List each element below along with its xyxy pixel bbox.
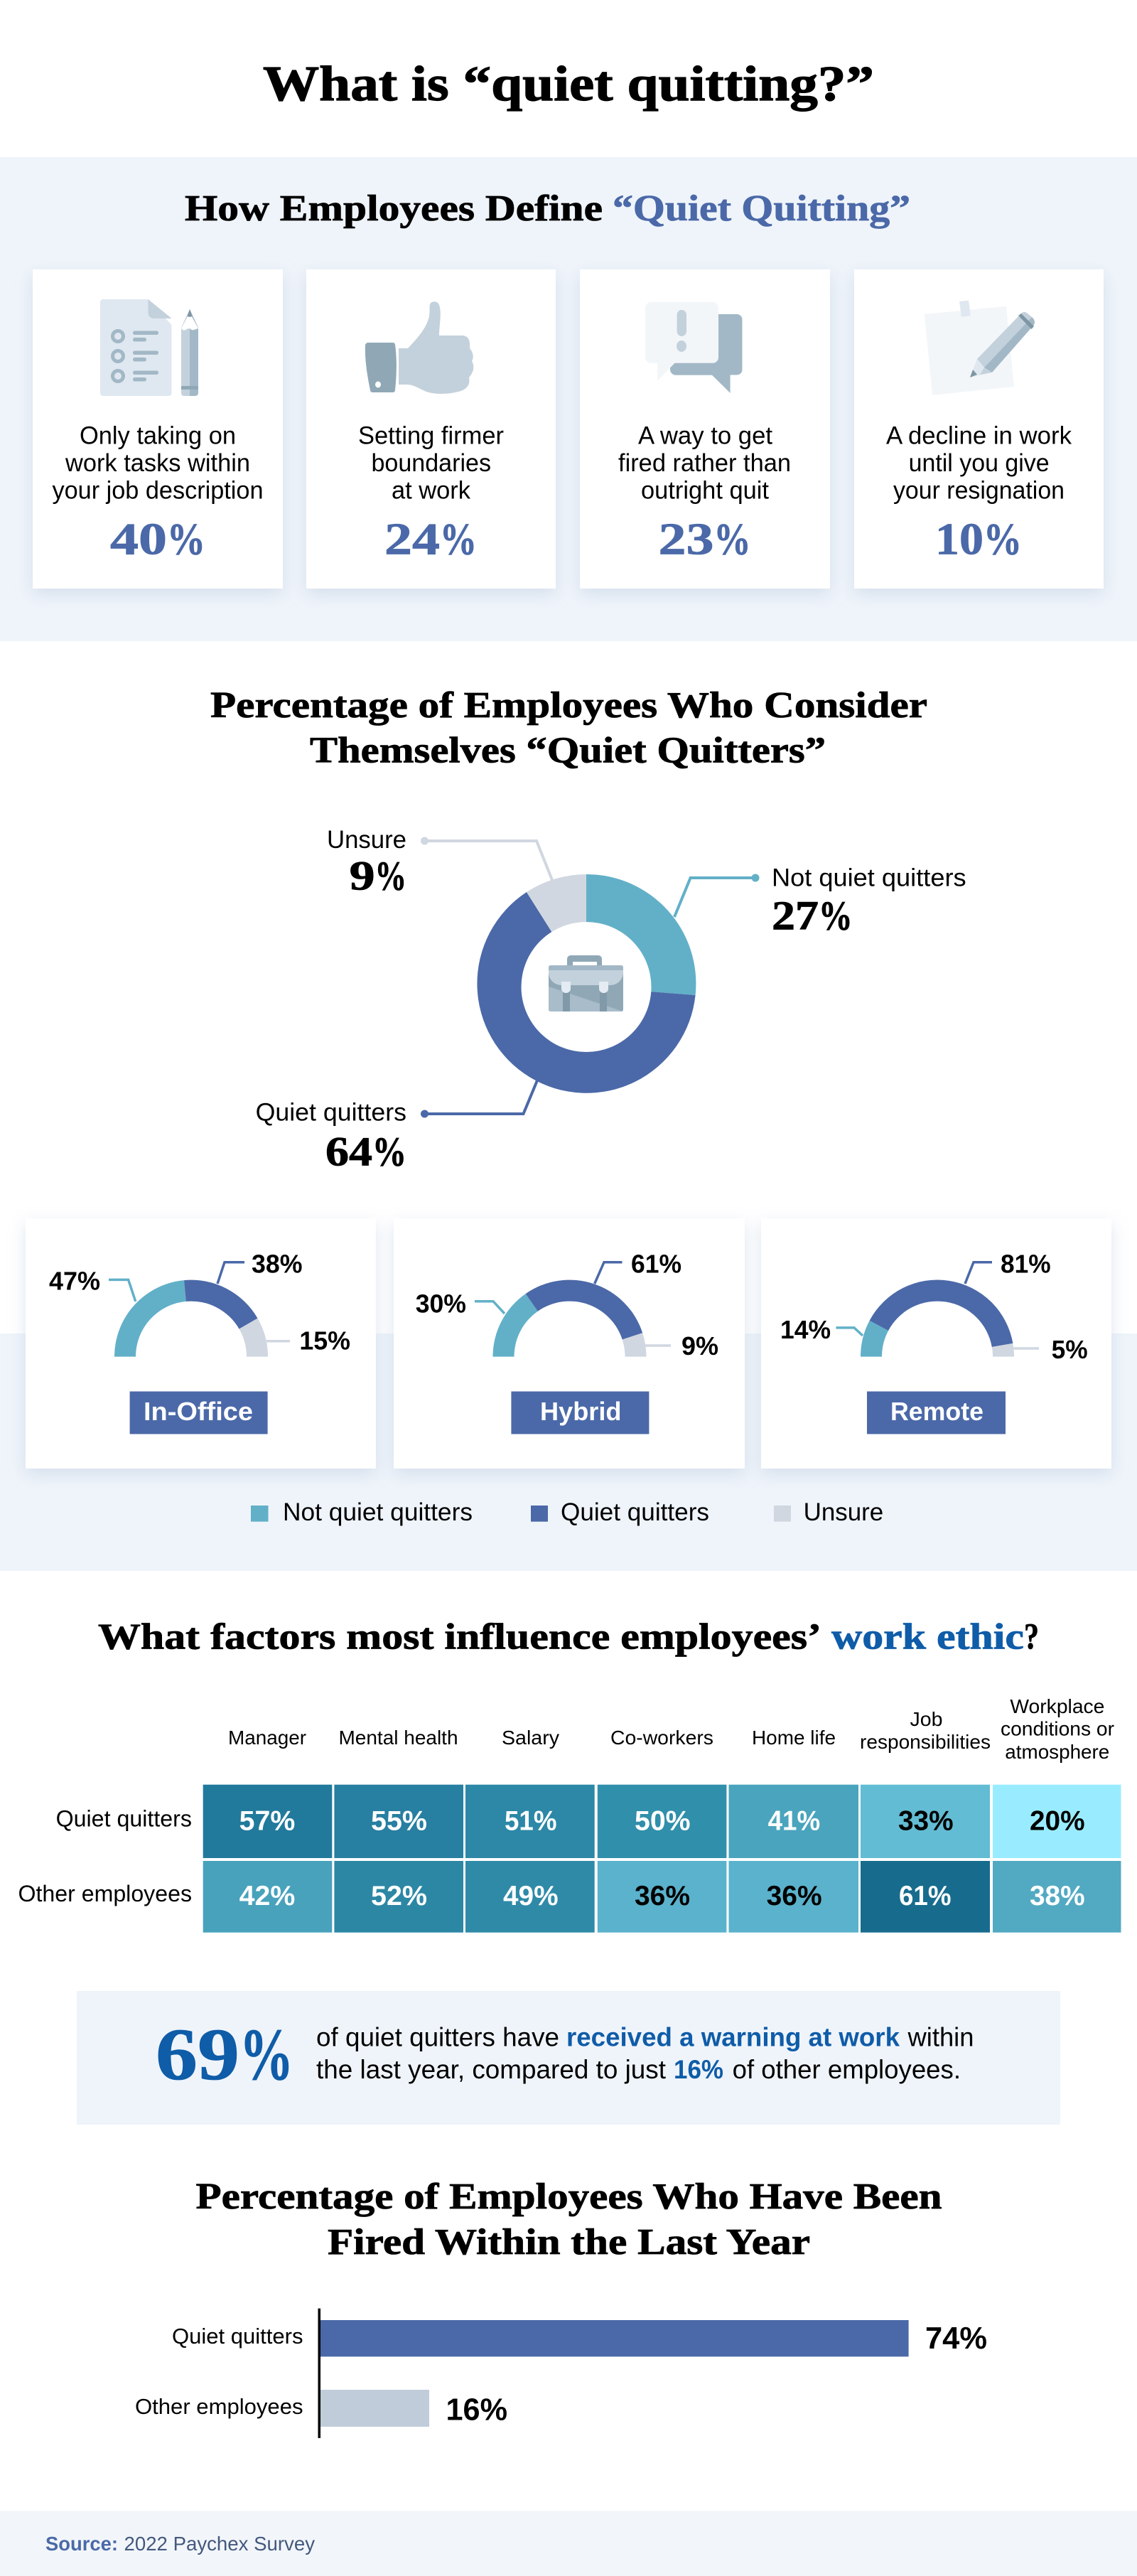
text: a way to get fired: fired rather than [618, 449, 791, 477]
text: decline in work: until you give [909, 449, 1050, 477]
callout: 69% received a warning: within [907, 2023, 974, 2051]
callout: 69% received a warning: received a warning at work [566, 2023, 900, 2051]
row: other employees: 61% [899, 1881, 951, 1911]
heading: how employees define: “Quiet Quitting” [613, 188, 910, 229]
stat: 23%: % [713, 513, 750, 564]
icon: thumbs up [365, 301, 473, 394]
card: remote [761, 1218, 1111, 1469]
heading: what factors influence work ethic: work ethic [831, 1616, 1024, 1657]
callout: quiet quitters 64%: % [372, 1129, 406, 1174]
footer: source: Source: [45, 2533, 118, 2555]
row: quiet quitters: 41% [768, 1805, 820, 1836]
label: 47% [49, 1267, 136, 1302]
stat: 10%: 10 [935, 513, 984, 564]
text: only taking on work tasks: Only taking on [80, 422, 236, 449]
callout: unsure 9%: % [375, 853, 406, 898]
text: setting firmer boundaries: Setting firmer [358, 422, 504, 449]
tag: remote [867, 1392, 1006, 1434]
icon: speech bubbles [645, 302, 742, 393]
column headers: Workplace [1010, 1695, 1104, 1717]
label: 61% [595, 1250, 681, 1284]
text: only taking on work tasks: work tasks within [65, 449, 250, 477]
icon: briefcase [549, 955, 623, 1011]
label: 30% [416, 1289, 505, 1318]
callout: 69% received a warning: the last year, compared to just [316, 2055, 667, 2084]
bar chart: fired within last year [135, 2309, 987, 2438]
row: other employees: 36% [767, 1881, 822, 1911]
legend [251, 1498, 883, 1526]
half donut: hybrid [493, 1280, 647, 1357]
callout: 69% received a warning [77, 1991, 1060, 2125]
column headers: Home life [752, 1727, 836, 1749]
callout: unsure 9%: 9 [350, 853, 375, 898]
column headers: conditions or [1001, 1718, 1114, 1740]
row: other employees: 49% [503, 1881, 559, 1911]
row: quiet quitters: 20% [1030, 1805, 1085, 1836]
label: 15%: 15% [299, 1326, 350, 1356]
icon: checklist and pencil [100, 299, 198, 396]
label: 9%: 9% [681, 1331, 718, 1361]
row: quiet quitters: 57% [239, 1805, 295, 1836]
column headers: responsibilities [860, 1731, 991, 1753]
card: firmer boundaries [306, 269, 556, 589]
label: 81%: 81% [1001, 1250, 1051, 1279]
title: What is “quiet quitting?” [263, 57, 874, 112]
label: 30%: 30% [416, 1289, 466, 1318]
row: other employees: 42% [239, 1881, 295, 1911]
column headers: atmosphere [1005, 1741, 1109, 1763]
row: other employees [203, 1861, 1121, 1933]
tag: remote: Remote [890, 1397, 984, 1426]
text: a way to get fired: A way to get [638, 422, 772, 449]
tag: hybrid: Hybrid [540, 1397, 621, 1426]
card: decline in work [854, 269, 1104, 589]
row label: other employees: Other employees [18, 1881, 192, 1906]
label: 38% [217, 1250, 303, 1284]
bar: other employees 16%: Other employees [135, 2394, 303, 2419]
slice: quiet quitters [477, 892, 696, 1093]
stat: 24%: % [440, 513, 477, 564]
text: setting firmer boundaries: boundaries [371, 449, 491, 477]
label: 15% [266, 1326, 350, 1356]
callout: not quiet quitters 27%: Not quiet quitters [772, 864, 966, 891]
text: only taking on work tasks [53, 422, 263, 505]
stat: 40%: % [167, 513, 205, 564]
heading: what factors influence work ethic: What factors most influence employees’ [98, 1616, 821, 1657]
bar: other employees 16%: 16% [446, 2393, 507, 2427]
callout: quiet quitters 64% [256, 1080, 537, 1174]
row: quiet quitters: 50% [635, 1805, 691, 1836]
row label: quiet quitters: Quiet quitters [56, 1805, 192, 1831]
column headers: Co-workers [610, 1727, 713, 1749]
column headers [228, 1695, 1114, 1763]
text: a way to get fired [618, 422, 791, 505]
heading: fired within the last year [196, 2177, 942, 2263]
label: 5% [1013, 1335, 1088, 1364]
tag: in-office: In-Office [144, 1397, 253, 1426]
card: hybrid [394, 1218, 745, 1469]
text: setting firmer boundaries [358, 422, 504, 505]
heading: fired within the last year: Fired Within the Last Year [328, 2222, 810, 2263]
callout: not quiet quitters 27%: 27 [772, 893, 819, 939]
label: 14% [780, 1315, 863, 1344]
label: 5%: 5% [1052, 1335, 1088, 1364]
half donut: remote [861, 1279, 1014, 1357]
row: other employees: 52% [371, 1881, 427, 1911]
card: in-office [26, 1218, 376, 1469]
column headers: Job [910, 1708, 942, 1730]
label: 9% [645, 1331, 718, 1361]
panel: work location breakdown [0, 1218, 1137, 1571]
callout: 69% received a warning: of quiet quitters have [316, 2023, 559, 2051]
text: only taking on work tasks: your job description [53, 476, 263, 505]
footer: source [0, 2511, 1137, 2576]
column headers: Salary [502, 1727, 559, 1749]
heading: percentage who consider themselves quiet quitters: Themselves “Quiet Quitters” [310, 731, 826, 771]
callout: not quiet quitters 27% [674, 864, 966, 939]
label: 61%: 61% [631, 1250, 681, 1279]
card: way to get fired [580, 269, 830, 589]
heading: fired within the last year: Percentage of Employees Who Have Been [196, 2177, 942, 2217]
callout: 69% received a warning: of other employees. [733, 2055, 961, 2084]
row: quiet quitters: 55% [371, 1805, 427, 1836]
text: decline in work [886, 422, 1072, 505]
slice: not quiet quitters [586, 874, 696, 995]
tag: in-office [130, 1392, 268, 1434]
legend: Unsure [804, 1498, 883, 1526]
column headers: Mental health [338, 1727, 458, 1749]
row: quiet quitters [203, 1785, 1121, 1858]
slice: unsure [527, 874, 586, 987]
callout: quiet quitters 64%: Quiet quitters [256, 1099, 406, 1127]
icon: note and pencil [925, 301, 1035, 395]
stat: 40%: 40 [110, 513, 167, 564]
bar: quiet quitters 74%: 74% [925, 2322, 987, 2356]
row: other employees: 36% [635, 1881, 690, 1911]
stat: 23%: 23 [658, 513, 713, 564]
text: a way to get fired: outright quit [641, 476, 769, 505]
label: 47%: 47% [49, 1267, 100, 1296]
label: 38%: 38% [252, 1250, 303, 1279]
text: decline in work: A decline in work [886, 422, 1072, 449]
callout: not quiet quitters 27%: % [819, 893, 853, 939]
donut chart [256, 826, 966, 1174]
row: quiet quitters: 33% [898, 1805, 954, 1836]
callout: 69% received a warning: % [239, 2014, 293, 2095]
row: other employees: 38% [1030, 1881, 1085, 1911]
bar: quiet quitters 74% [172, 2320, 987, 2356]
callout: 69% received a warning: 16% [674, 2055, 723, 2084]
heading: percentage who consider themselves quiet quitters: Percentage of Employees Who Consider [210, 685, 927, 726]
footer: source: 2022 Paychex Survey [124, 2533, 315, 2555]
text: decline in work: your resignation [893, 476, 1065, 505]
callout: unsure 9%: Unsure [327, 826, 406, 854]
column headers: Manager [228, 1727, 306, 1749]
tag: hybrid [511, 1392, 649, 1434]
heatmap table [18, 1695, 1121, 1933]
heading: how employees define [185, 188, 910, 229]
label: 81% [965, 1250, 1051, 1284]
callout: quiet quitters 64%: 64 [325, 1129, 372, 1174]
stat: 24%: 24 [384, 513, 440, 564]
heading: percentage who consider themselves quiet quitters [210, 685, 927, 771]
callout: 69% received a warning: 69 [156, 2014, 239, 2095]
heading: how employees define: How Employees Define [185, 188, 603, 229]
half donut: in-office [114, 1280, 268, 1357]
label: 14%: 14% [780, 1315, 831, 1344]
card: job description [33, 269, 283, 589]
row: quiet quitters: 51% [505, 1805, 557, 1836]
bar: other employees 16% [135, 2390, 507, 2427]
stat: 10%: % [984, 513, 1022, 564]
bar: quiet quitters 74%: Quiet quitters [172, 2324, 303, 2349]
heading: what factors influence work ethic: ? [1024, 1616, 1039, 1657]
panel: how employees define quiet quitting [0, 157, 1137, 641]
text: setting firmer boundaries: at work [392, 476, 470, 505]
legend: Not quiet quitters [283, 1498, 473, 1526]
heading: what factors influence work ethic [98, 1616, 1039, 1657]
legend: Quiet quitters [561, 1498, 709, 1526]
callout: unsure 9% [327, 826, 552, 898]
